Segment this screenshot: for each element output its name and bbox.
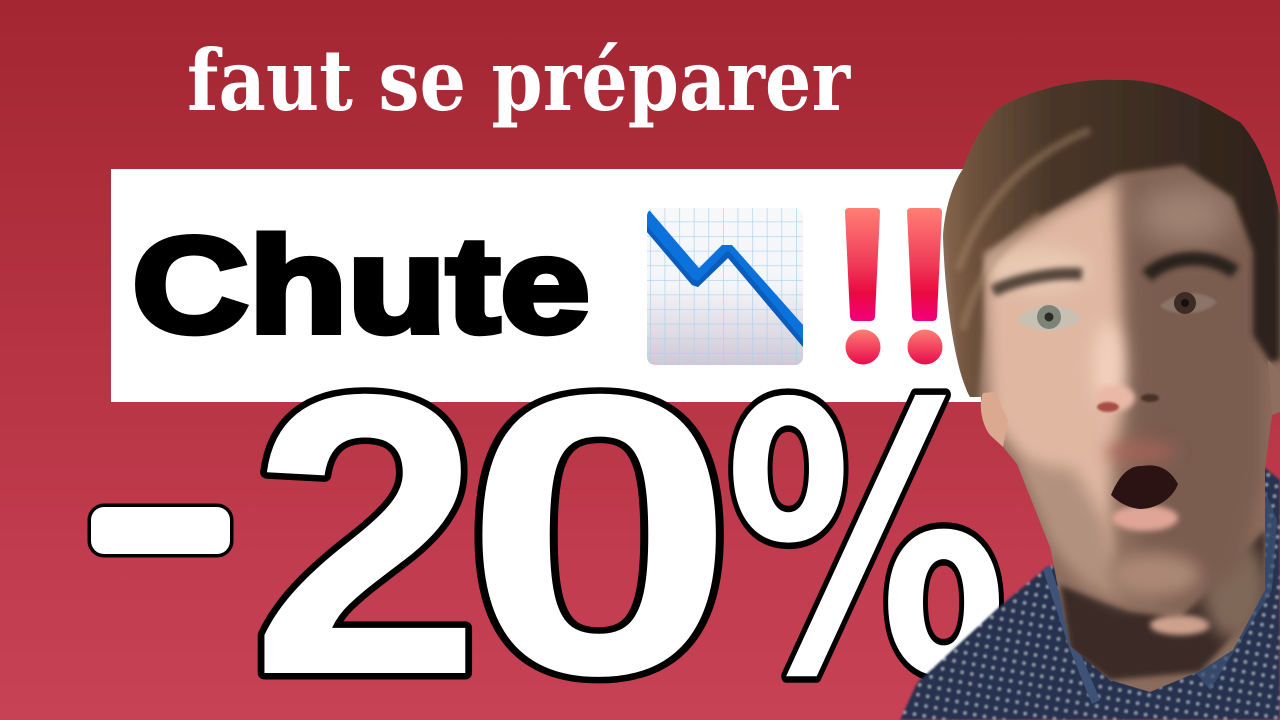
left eye [1017, 305, 1082, 330]
right eyebrow [1147, 259, 1235, 276]
neck highlight [1150, 615, 1210, 635]
lower lip [1112, 505, 1178, 531]
minus sign [91, 507, 230, 554]
left eyebrow [993, 274, 1082, 291]
open mouth [1111, 465, 1178, 509]
shirt [900, 468, 1280, 720]
shirt collar right [1195, 485, 1277, 690]
left ear [981, 392, 1008, 447]
person portrait [900, 70, 1280, 720]
neck shadow [1060, 530, 1265, 680]
head and neck [930, 70, 1280, 710]
icon: falling chart [647, 208, 803, 365]
shirt collar left [1043, 565, 1100, 704]
hair light streaks [958, 130, 1090, 330]
icon: double exclamation marks [845, 208, 942, 364]
stubble jaw [1020, 460, 1130, 608]
nose highlight [1093, 323, 1123, 407]
upper lip [1104, 441, 1176, 463]
right eye [1160, 292, 1217, 314]
forehead tone [1135, 185, 1235, 245]
hair [930, 70, 1280, 400]
title: faut se préparer [187, 31, 852, 130]
face lit side [983, 180, 1125, 560]
face shadow side [1130, 165, 1262, 610]
right ear [1268, 360, 1280, 415]
nostrils [1097, 402, 1119, 412]
big number: -20% [91, 311, 1008, 720]
white banner [111, 169, 981, 402]
banner word: Chute: Chute [132, 209, 590, 361]
